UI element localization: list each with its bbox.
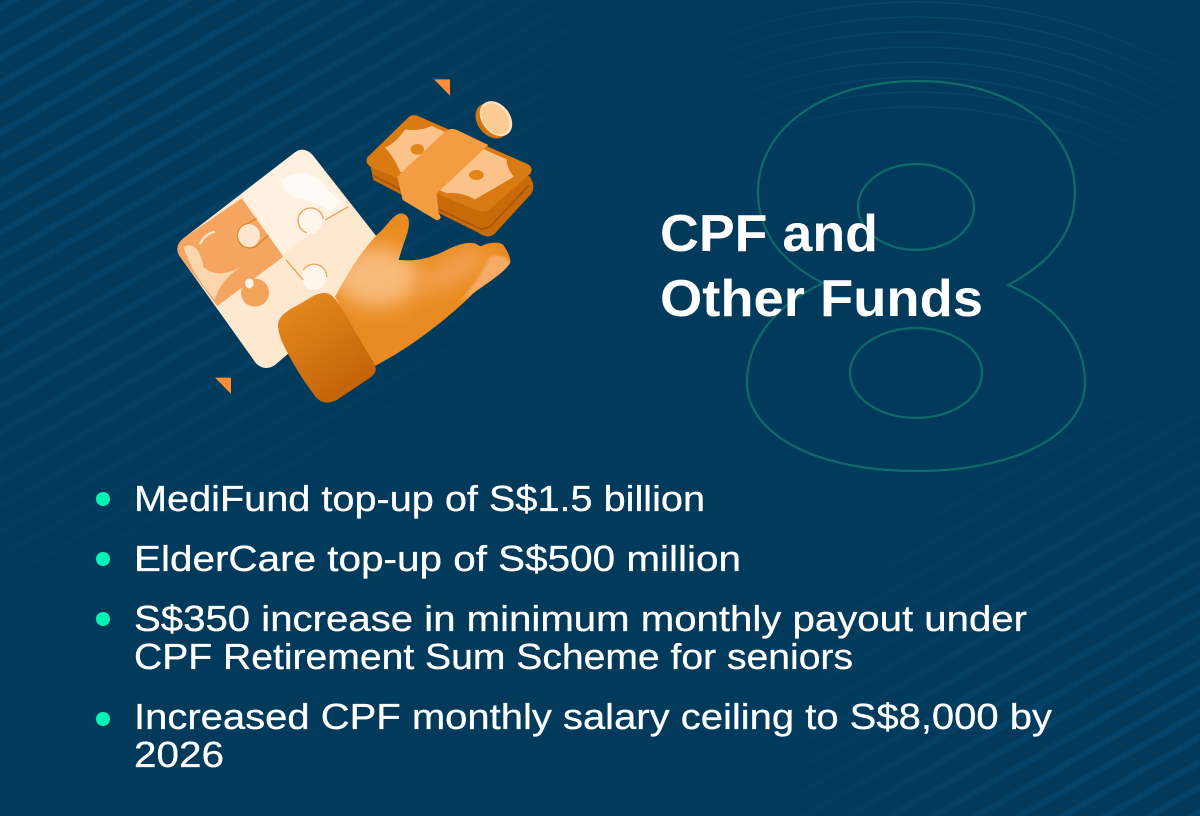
icon: orange triangle top [434, 79, 450, 96]
title [660, 205, 983, 328]
bullet 4: Increased CPF monthly salary ceiling to S$8,000 by [134, 696, 1052, 737]
icon: orange triangle bottom [215, 378, 231, 394]
illustration: hand holding puzzle and money [177, 79, 533, 403]
bullet 4: 2026 [134, 734, 224, 775]
bullet list [96, 478, 1052, 775]
bullet 3: CPF Retirement Sum Scheme for seniors [134, 636, 853, 677]
bullet 3 [96, 598, 1027, 677]
puzzle knobs [237, 207, 348, 307]
icon: puzzle [177, 150, 377, 368]
shirt cuff [278, 293, 376, 403]
bullet 4 [96, 696, 1052, 775]
icon: stack of banknotes [366, 115, 533, 237]
bullet 2: ElderCare top-up of S$500 million [134, 538, 741, 579]
icon: coin [469, 95, 519, 145]
title: CPF and [660, 205, 878, 263]
puzzle piece: top cream [241, 150, 348, 255]
bullet 3: S$350 increase in minimum monthly payout under [134, 598, 1027, 639]
bullet 1: MediFund top-up of S$1.5 billion [134, 478, 705, 519]
icon: open hand [278, 207, 520, 403]
title: Other Funds [660, 270, 983, 328]
large outlined number 8 [747, 81, 1085, 471]
puzzle piece: orange [177, 198, 283, 306]
